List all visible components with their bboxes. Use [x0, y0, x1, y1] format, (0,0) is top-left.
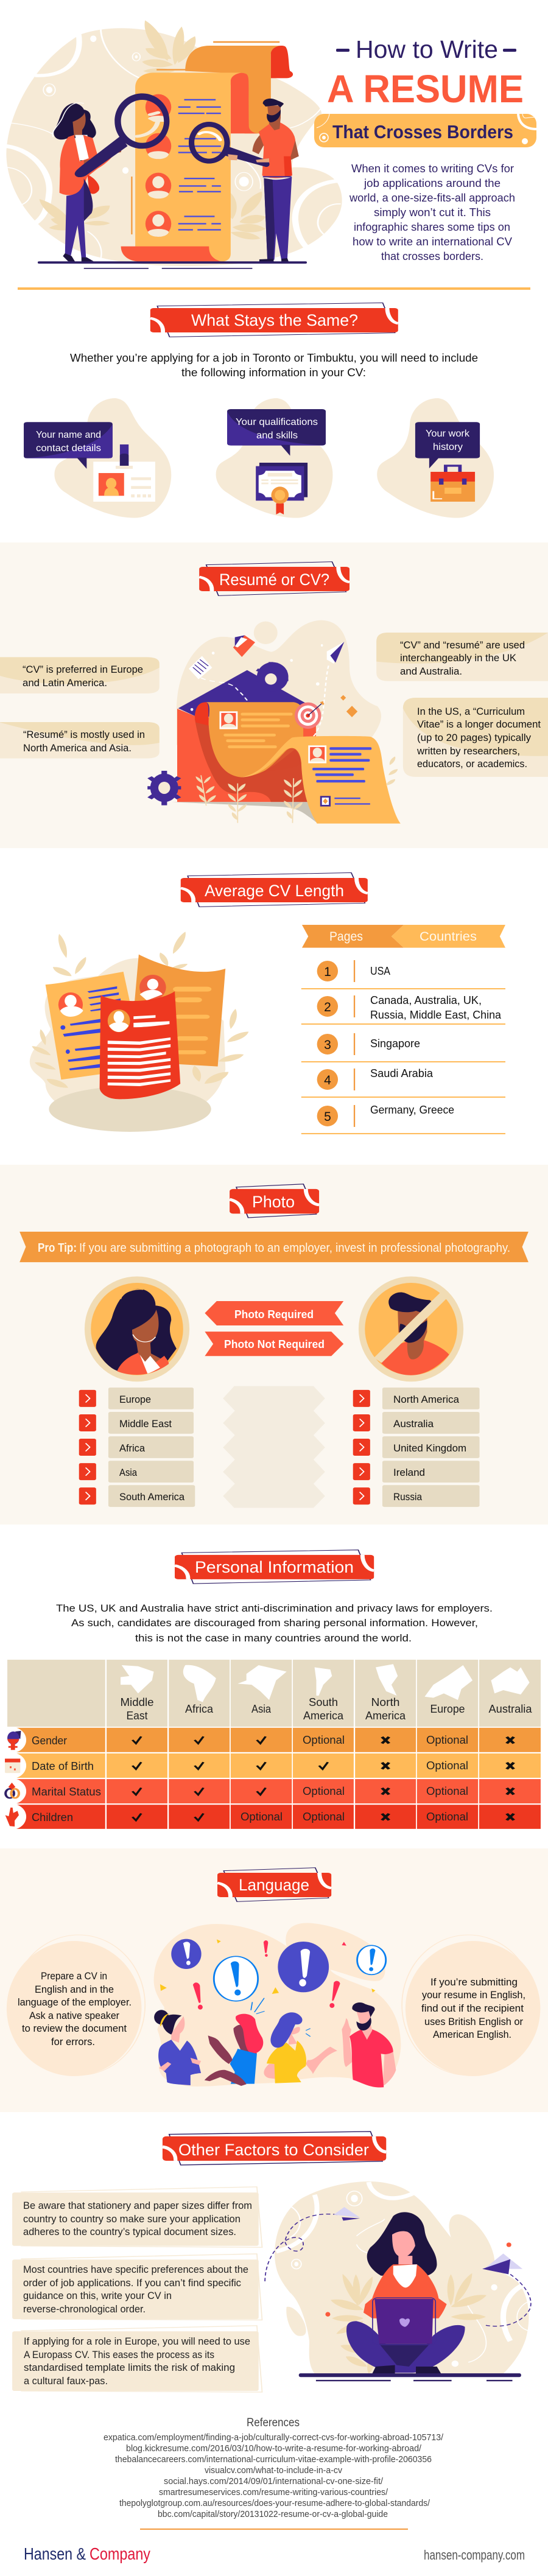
tip 1: adheres to the country’s typical document sizes.	[23, 2226, 236, 2237]
man	[252, 99, 299, 262]
lead text: The US, UK and Australia have strict anti-discrimination and privacy laws for employers.	[56, 1602, 493, 1614]
banner shape	[230, 1184, 319, 1218]
list: photo required countries: South America	[119, 1491, 185, 1503]
title banner: that crosses borders: That Crosses Borders	[332, 121, 513, 142]
right text: If you’re submitting	[430, 1976, 518, 1988]
item label: name and contact: contact details	[36, 443, 101, 454]
banner shape	[199, 562, 350, 595]
back scroll	[185, 46, 281, 133]
section: other factors	[12, 2132, 531, 2563]
list: photo not required countries: Australia	[393, 1418, 434, 1430]
item label: name and contact: Your name and	[36, 430, 101, 440]
callout: cv preferred	[23, 664, 143, 689]
intro text: When it comes to writing CVs for	[351, 163, 514, 175]
callout: resume used: North America and Asia.	[23, 742, 132, 754]
table text	[324, 965, 502, 1124]
icon: gender	[7, 1731, 21, 1750]
heading: Language	[239, 1876, 309, 1894]
tip 3: If applying for a role in Europe, you will need to use	[24, 2336, 250, 2347]
ground	[38, 261, 307, 264]
shadow and front page	[171, 802, 318, 824]
row labels: Marital Status	[32, 1786, 101, 1798]
heading: Resumé or CV?	[219, 570, 329, 589]
shapes	[7, 1868, 540, 2088]
logo: Hansen &	[24, 2544, 86, 2563]
icon: id card	[93, 444, 155, 502]
intro text	[349, 163, 515, 262]
item label: work history: history	[433, 442, 463, 452]
table column headers: East	[127, 1710, 147, 1722]
alert bubbles	[160, 1939, 386, 2037]
resume photos	[146, 94, 171, 237]
tip 1: country to country so make sure your application	[23, 2213, 241, 2225]
left circle	[7, 1935, 145, 2076]
callout: interchangeable: and Australia.	[400, 665, 462, 677]
heading: What Stays the Same?	[191, 311, 358, 329]
shapes	[12, 2132, 531, 2392]
section: photo	[0, 1165, 548, 1525]
row: date of birth	[7, 1753, 541, 1778]
background blob	[154, 1923, 401, 2087]
pro tip ribbon	[19, 1232, 529, 1262]
table lines	[301, 988, 505, 1134]
shapes: three items	[24, 398, 494, 518]
pro tip text: Pro Tip:	[38, 1241, 77, 1255]
list: photo not required countries: Russia	[393, 1491, 422, 1503]
left text: to review the document	[22, 2023, 127, 2034]
table text: 1	[324, 965, 331, 979]
table column headers: South	[309, 1696, 338, 1708]
table text: Germany, Greece	[370, 1104, 454, 1116]
table header ribbon	[302, 925, 505, 948]
table column headers	[121, 1696, 533, 1722]
optional cells: Optional	[426, 1760, 468, 1772]
lists: arrow buttons	[79, 1390, 370, 1504]
callout: curriculum vitae	[416, 706, 541, 770]
list: photo not required countries: North America	[393, 1394, 460, 1405]
tip boxes	[12, 2187, 262, 2392]
speech bubbles	[24, 409, 480, 469]
shapes	[30, 872, 505, 1134]
shapes	[19, 1184, 529, 1508]
table text: Saudi Arabia	[370, 1067, 434, 1079]
person: bearded man	[342, 2002, 396, 2088]
callout: curriculum vitae: In the US, a “Curriculum	[417, 706, 525, 717]
list: photo required countries: Europe	[119, 1394, 151, 1405]
optional cells: Optional	[426, 1785, 468, 1797]
item label: qualifications: Your qualifications	[236, 417, 318, 427]
right text	[421, 1976, 525, 2040]
optional cells: Optional	[303, 1811, 345, 1823]
column headers	[329, 930, 477, 944]
left text: language of the employer.	[18, 1996, 132, 2008]
left text	[18, 1970, 132, 2048]
table column headers: Europe	[430, 1703, 465, 1715]
shapes: banner and table	[0, 1550, 541, 1830]
table column headers: Africa	[185, 1703, 214, 1715]
section: resume or cv	[0, 542, 548, 848]
banner shape	[181, 872, 368, 907]
table column headers: Asia	[251, 1703, 272, 1715]
heading: Other Factors to Consider	[178, 2141, 369, 2159]
section: header	[6, 19, 536, 290]
banner shape	[163, 2132, 386, 2165]
right text: your resume in English,	[422, 1989, 525, 2001]
envelope	[177, 662, 316, 802]
person: woman in yellow	[264, 2012, 337, 2083]
portrait: man crossed out	[359, 1276, 463, 1381]
callout: cv preferred: and Latin America.	[23, 677, 107, 689]
tip 2: reverse-chronological order.	[23, 2303, 146, 2315]
list: photo required countries: Middle East	[119, 1418, 172, 1430]
row icon backgrounds	[0, 1727, 26, 1830]
table text: 4	[324, 1073, 331, 1087]
list: photo not required countries: Ireland	[393, 1467, 425, 1478]
callout: curriculum vitae: (up to 20 pages) typically	[417, 732, 531, 743]
item label: qualifications	[236, 417, 318, 441]
floating items	[189, 635, 357, 737]
row labels: Children	[32, 1811, 73, 1823]
references list: blog.kickresume.com/2016/03/10/how-to-write-a-resume-for-working-abroad/	[126, 2443, 422, 2454]
maps	[121, 1664, 530, 1702]
callout: resume used	[23, 729, 145, 754]
icon: certificate	[256, 463, 307, 514]
right text: American English.	[433, 2029, 511, 2040]
callout: resume used: “Resumé” is mostly used in	[23, 729, 145, 740]
intro text: simply won’t cut it. This	[374, 206, 491, 219]
left text: Prepare a CV in	[41, 1970, 107, 1982]
callout: interchangeable	[400, 639, 525, 677]
tip 3: standardised template limits the risk of making	[24, 2362, 235, 2373]
callout: interchangeable: interchangeably in the UK	[400, 652, 517, 664]
column headers: Pages	[329, 930, 363, 944]
woman	[53, 103, 122, 262]
right circle	[402, 1935, 540, 2076]
list: photo required countries: Africa	[119, 1442, 146, 1454]
label: photo not required: Photo Not Required	[224, 1338, 325, 1350]
plants	[194, 756, 399, 823]
references list: social.hays.com/2014/09/01/international-cv-one-size-fit/	[164, 2476, 384, 2487]
callout: curriculum vitae: Vitae” is a longer document	[417, 718, 541, 730]
right text: uses British English or	[424, 2016, 523, 2027]
list: photo not required countries: United Kingdom	[393, 1442, 466, 1454]
table column headers: Middle	[121, 1696, 153, 1708]
illustration: stacked resumes	[30, 931, 251, 1132]
optional cells: Optional	[303, 1785, 345, 1797]
target	[295, 701, 325, 729]
table header cells	[7, 1660, 541, 1727]
section: personal information	[0, 1550, 541, 1830]
icon: briefcase	[430, 466, 475, 502]
check and cross marks	[133, 1736, 328, 1820]
row labels	[32, 1735, 101, 1823]
table text: Russia, Middle East, China	[370, 1009, 502, 1021]
heading: Personal Information	[195, 1558, 354, 1576]
tip 2: order of job applications. If you can’t find specific	[23, 2277, 241, 2289]
person: woman with red hair	[205, 2014, 263, 2086]
lead text	[56, 1602, 493, 1644]
references list: smartresumeservices.com/resume-writing-various-countries/	[159, 2487, 388, 2497]
icon: calendar	[5, 1759, 20, 1773]
row: children	[7, 1805, 541, 1829]
tip 3: a cultural faux-pas.	[24, 2375, 108, 2387]
column headers: Countries	[420, 930, 477, 944]
gear	[147, 771, 181, 805]
pro tip text: If you are submitting a photograph to an employer, invest in professional photography.	[79, 1241, 510, 1255]
references heading: References	[247, 2416, 300, 2429]
person: woman with bun	[154, 2010, 201, 2085]
table text: 3	[324, 1038, 331, 1052]
callout: curriculum vitae: written by researchers,	[416, 745, 520, 757]
table text: Canada, Australia, UK,	[370, 994, 482, 1006]
row: gender	[7, 1728, 541, 1752]
optional cells: Optional	[303, 1734, 345, 1746]
item label: work history: Your work	[426, 429, 470, 439]
row labels: Date of Birth	[32, 1760, 94, 1772]
item label: work history	[426, 429, 470, 452]
title: a resume: A RESUME	[327, 67, 524, 111]
callout: cv preferred: “CV” is preferred in Europe	[23, 664, 143, 675]
references list: visualcv.com/what-to-include-in-a-cv	[205, 2465, 342, 2476]
callout: interchangeable: “CV” and “resumé” are used	[400, 639, 525, 651]
banner shape	[175, 1550, 374, 1584]
intro text: job applications around the	[364, 177, 501, 189]
table text: Singapore	[370, 1037, 420, 1050]
intro text: world, a one-size-fits-all approach	[349, 192, 515, 204]
table text: USA	[370, 965, 390, 977]
item label: qualifications: and skills	[256, 430, 298, 441]
table column headers: America	[365, 1710, 406, 1722]
left text: English and in the	[35, 1984, 114, 1995]
title: how to write: How to Write	[356, 35, 498, 63]
left text: Ask a native speaker	[29, 2010, 119, 2021]
portrait: woman	[85, 1276, 189, 1381]
callout: curriculum vitae: educators, or academics.	[417, 758, 527, 770]
lists: boxes	[108, 1388, 480, 1507]
illustration: two people inspecting a resume	[6, 19, 342, 269]
illustration: woman with laptop	[275, 2181, 530, 2381]
section: average cv length	[30, 872, 505, 1134]
optional cells	[241, 1734, 468, 1823]
tip 3: A Europass CV. This eases the process as its	[24, 2349, 214, 2360]
tip 3	[24, 2336, 250, 2387]
front scroll	[135, 72, 241, 262]
background blob	[177, 620, 381, 765]
tip 1: Be aware that stationery and paper sizes differ from	[23, 2200, 252, 2211]
magnifying glasses	[75, 93, 270, 177]
row labels: Gender	[32, 1735, 67, 1747]
paper planes	[265, 2207, 531, 2326]
tip 2	[23, 2264, 248, 2315]
optional cells: Optional	[241, 1811, 283, 1823]
heading: Photo	[252, 1193, 295, 1211]
references list	[104, 2432, 444, 2519]
illustration and callout shapes	[0, 562, 548, 824]
section: language	[0, 1848, 548, 2112]
intro text: infographic shares some tips on	[354, 221, 510, 233]
list: photo not required countries	[393, 1394, 466, 1503]
right text: find out if the recipient	[421, 2002, 524, 2014]
logo	[24, 2544, 150, 2563]
label: photo required: Photo Required	[234, 1308, 314, 1321]
list: photo required countries: Asia	[119, 1467, 137, 1478]
callout shapes	[0, 633, 548, 777]
lead text: this is not the case in many countries around the world.	[135, 1632, 412, 1644]
row: marital status	[7, 1779, 541, 1803]
tip 2: guidance on this, write your CV in	[23, 2290, 172, 2301]
table column headers: North	[371, 1696, 399, 1708]
lead text	[70, 352, 478, 379]
table column headers: America	[303, 1710, 344, 1722]
list: photo required countries	[119, 1394, 185, 1503]
tip 1	[23, 2200, 252, 2237]
banner shape	[150, 303, 398, 337]
intro text: how to write an international CV	[353, 236, 512, 248]
background blob	[6, 28, 342, 266]
icon: hands	[5, 1808, 19, 1827]
lead text: Whether you’re applying for a job in Toronto or Timbuktu, you will need to include	[70, 352, 478, 364]
section: what stays the same	[24, 303, 494, 518]
title banner: that crosses borders	[314, 114, 536, 147]
left text: for errors.	[51, 2036, 95, 2048]
logo: Company	[90, 2544, 150, 2563]
tip 2: Most countries have specific preferences about the	[23, 2264, 248, 2275]
central hexagon strip	[223, 1386, 325, 1508]
references list: expatica.com/employment/finding-a-job/culturally-correct-cvs-for-working-abroad-105713/	[104, 2432, 444, 2443]
table text: 5	[324, 1110, 331, 1124]
table column headers: Australia	[488, 1703, 533, 1715]
leaves	[34, 19, 268, 242]
icon: rings	[5, 1785, 19, 1798]
optional cells: Optional	[426, 1811, 468, 1823]
label ribbons	[205, 1301, 343, 1356]
intro text: that crosses borders.	[381, 250, 483, 262]
references list: bbc.com/capital/story/20131022-resume-or-cv-a-global-guide	[158, 2509, 388, 2519]
lead text: the following information in your CV:	[181, 367, 366, 379]
item label: name and contact	[36, 430, 101, 454]
table text: 2	[324, 1000, 331, 1014]
references list: thebalancecareers.com/international-curriculum-vitae-example-with-profile-2060356	[115, 2454, 432, 2465]
banner shape	[217, 1868, 331, 1901]
optional cells: Optional	[426, 1734, 468, 1746]
lead text: As such, candidates are discouraged from sharing personal information. However,	[71, 1617, 478, 1629]
references list: thepolyglotgroup.com.au/resources/does-your-resume-adhere-to-global-standards/	[119, 2498, 430, 2508]
heading: Average CV Length	[205, 882, 344, 900]
